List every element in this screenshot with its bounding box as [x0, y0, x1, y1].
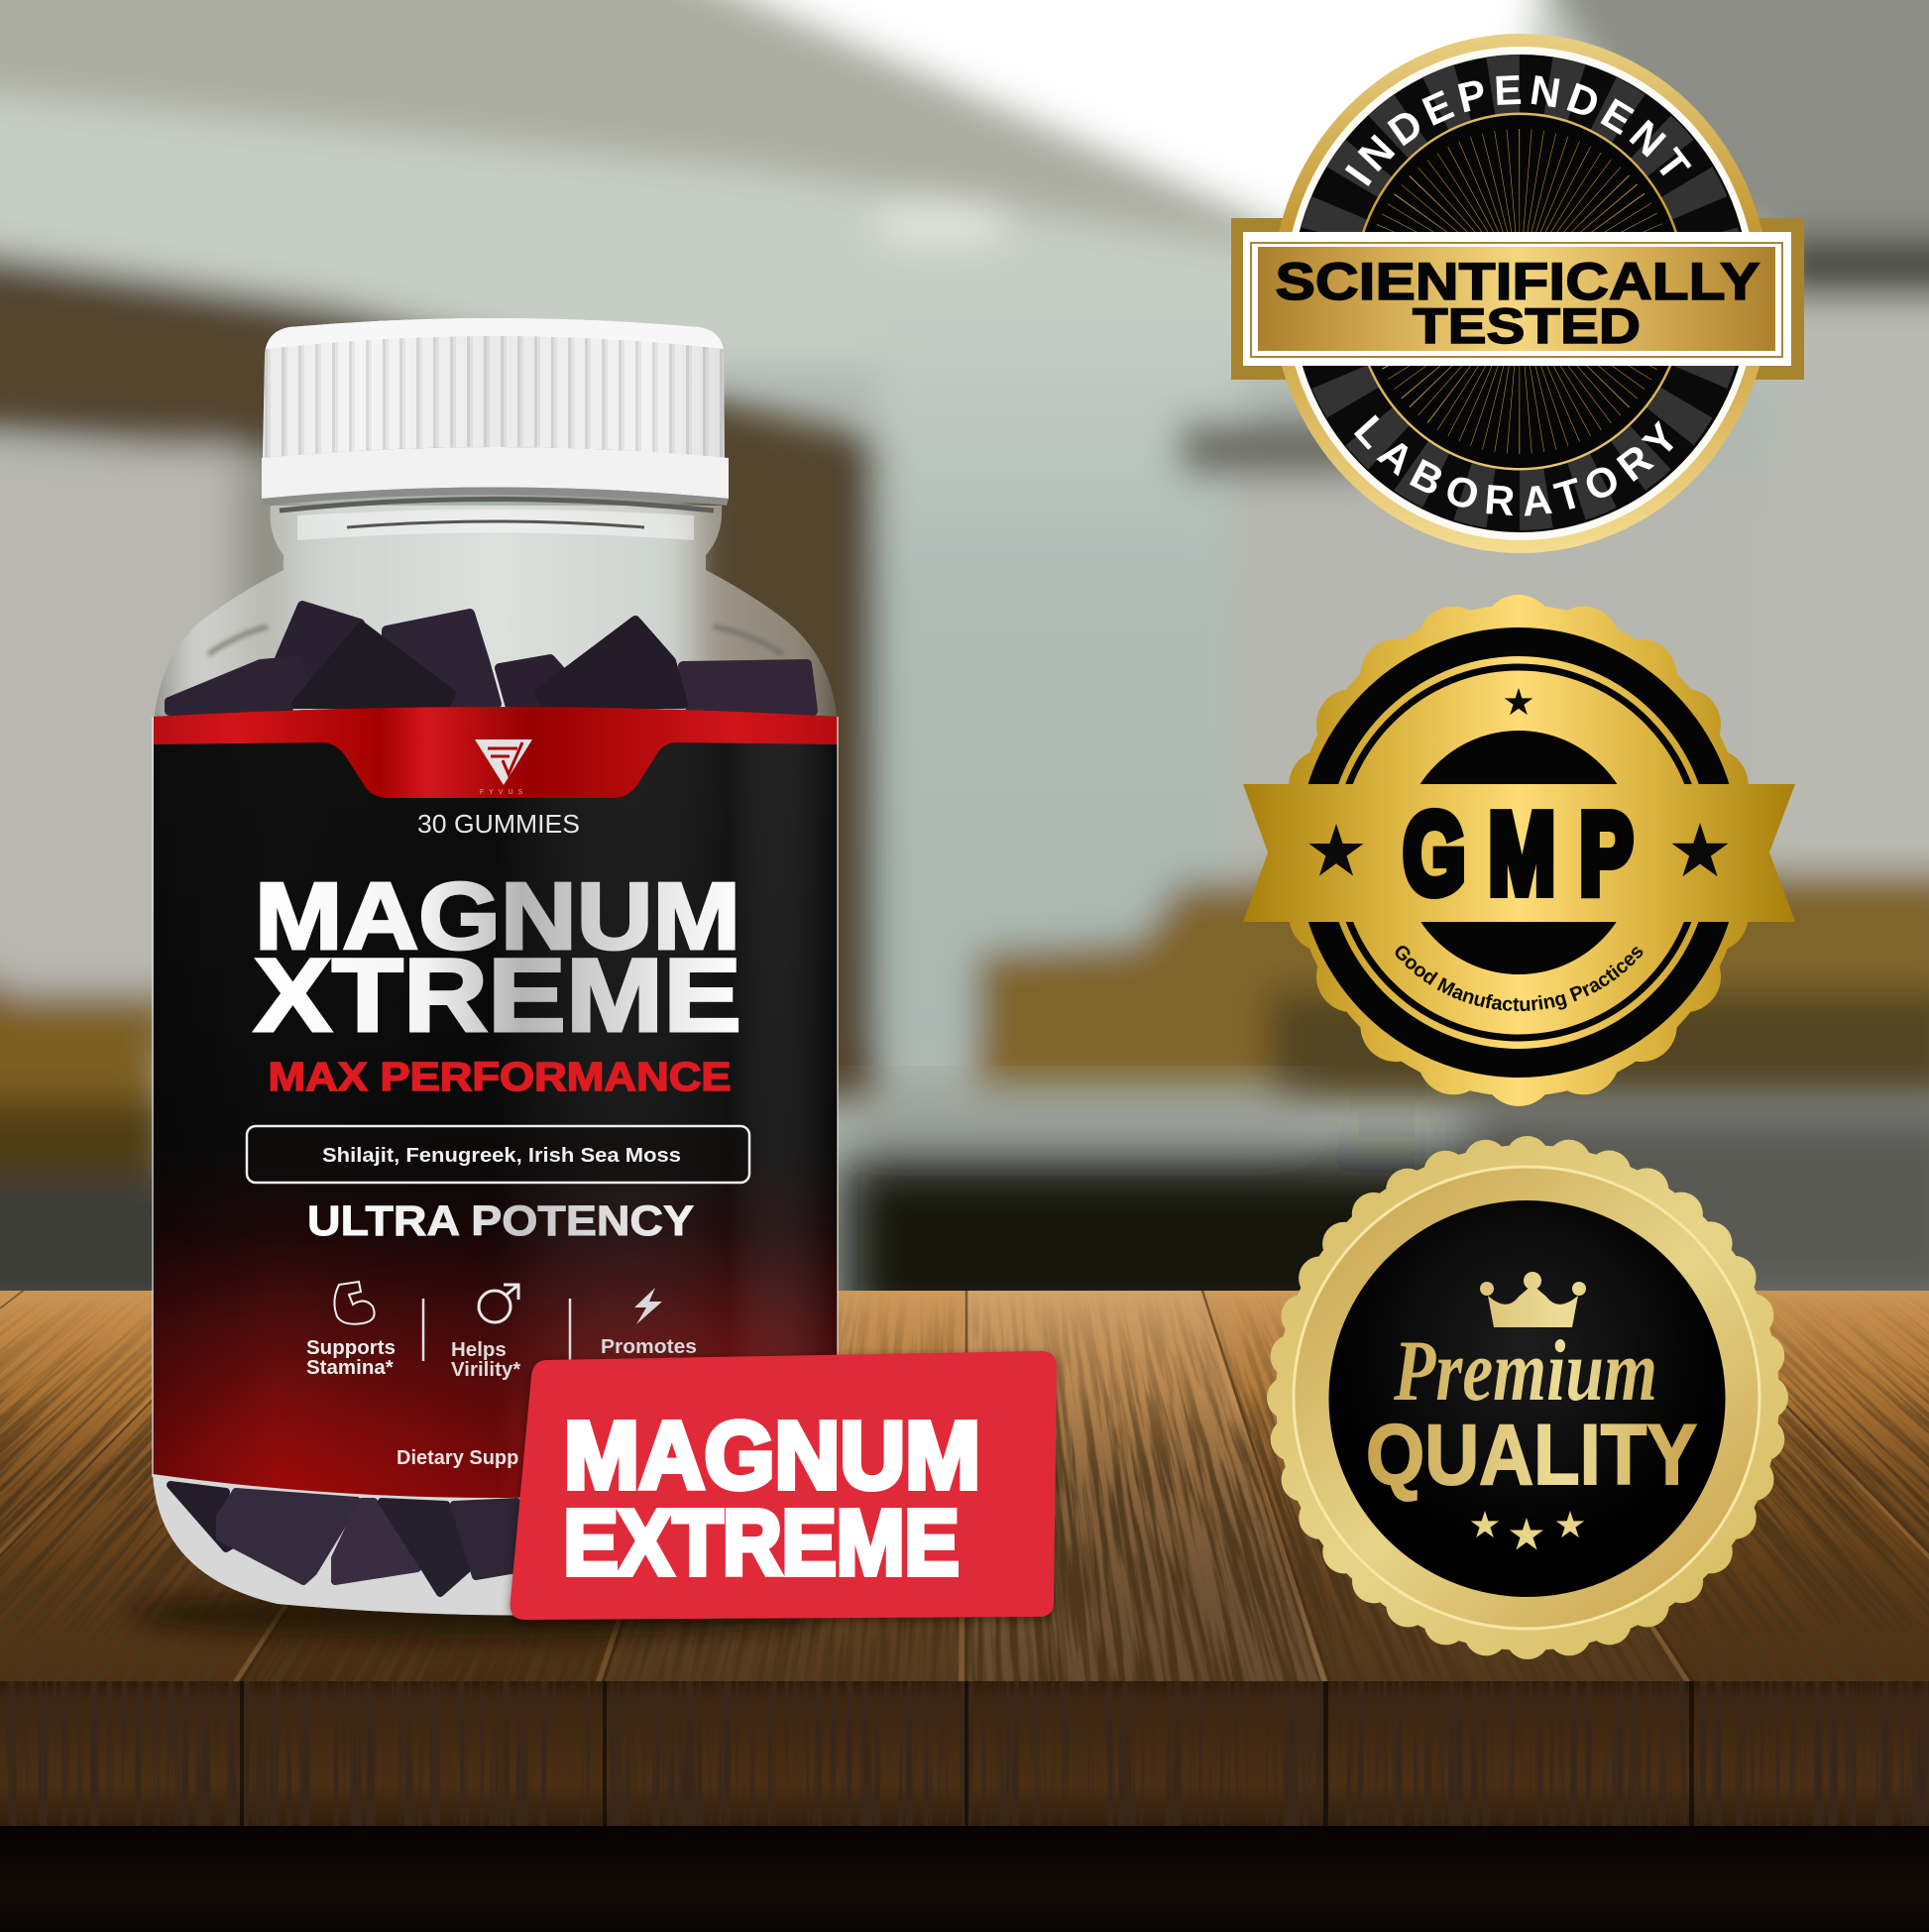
- text: Max Performance: MAX PERFORMANCE: [268, 1054, 732, 1099]
- ingredients pill: Shilajit, Fenugreek, Irish Sea Moss: [322, 1144, 681, 1167]
- wood table top surface: [0, 1291, 1929, 1681]
- blurred room background: [0, 0, 1929, 1291]
- text: Good Manufacturing Practices: Good Manufacturing Practices: [1396, 946, 1644, 1011]
- text: 30 Gummies: 30 GUMMIES: [417, 809, 580, 839]
- brand logo: FYVUS: [480, 789, 527, 796]
- divider: [422, 1299, 424, 1361]
- text: Extreme: EXTREME: [563, 1491, 960, 1594]
- text: Magnum: MAGNUM: [255, 863, 740, 969]
- text: Scientifically: SCIENTIFICALLY: [1275, 253, 1760, 311]
- star: right: [1671, 823, 1729, 876]
- ribbon: [1243, 784, 1795, 922]
- bottle: [153, 318, 838, 1616]
- icon: male symbol: [479, 1285, 518, 1322]
- gummies below label: [170, 1485, 516, 1593]
- icon: crown: [1480, 1272, 1586, 1327]
- icon: lightning bolt: [634, 1288, 662, 1324]
- text: Laboratory: LABORATORY: [1354, 414, 1673, 516]
- text: Quality: QUALITY: [1366, 1408, 1697, 1503]
- text: Xtreme: XTREME: [254, 938, 741, 1054]
- wood table front edge and dark base: [0, 1681, 1929, 1932]
- label body: [153, 707, 838, 1498]
- benefit: stamina: Supports: [306, 1336, 396, 1359]
- star: top: [1505, 688, 1532, 715]
- icon: muscle arm: [334, 1282, 375, 1324]
- badge: GMP seal: [1243, 595, 1795, 1106]
- gummies above label: [170, 606, 813, 711]
- benefit: stamina: Stamina*: [306, 1356, 394, 1379]
- bottle cap: [262, 318, 729, 506]
- badge: Premium Quality seal: [1276, 1145, 1779, 1650]
- banner frame: [1243, 232, 1791, 366]
- glass body: [153, 506, 838, 1616]
- text: Dietary Supplement: Dietary Supp: [397, 1447, 518, 1469]
- icons: three stars: [1471, 1511, 1584, 1550]
- benefit: virility: Virility*: [451, 1358, 520, 1381]
- text: Tested: TESTED: [1413, 298, 1641, 354]
- red tag: Magnum Extreme: [511, 1351, 1057, 1623]
- text: GMP: GMP: [1403, 790, 1633, 918]
- benefit: virility: Helps: [451, 1338, 507, 1361]
- text: Ultra Potency: ULTRA POTENCY: [307, 1197, 694, 1245]
- brand logo: [475, 739, 532, 796]
- banner back tab: [1231, 218, 1804, 380]
- label red band: [154, 707, 838, 798]
- text: Magnum: MAGNUM: [564, 1403, 980, 1509]
- badge: Independent Laboratory Scientifically Tested: [1231, 34, 1804, 553]
- benefit: promotes: Promotes: [601, 1335, 697, 1358]
- divider: [569, 1299, 571, 1361]
- star: left: [1308, 824, 1364, 875]
- text: Independent: INDEPENDENT: [1344, 75, 1691, 186]
- text: Premium: Premium: [1393, 1323, 1657, 1420]
- ingredients pill: [247, 1126, 749, 1183]
- bottle shadow on table: [129, 1590, 823, 1638]
